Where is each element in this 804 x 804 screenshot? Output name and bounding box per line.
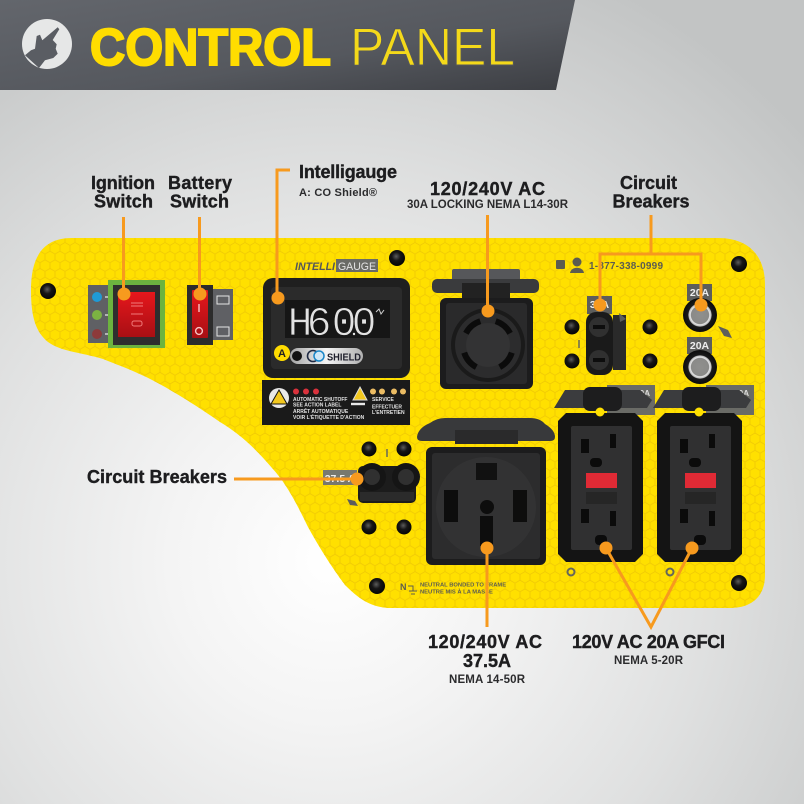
label: circuit breakers top: Breakers: [612, 192, 690, 212]
neutral bonded note: N: [400, 582, 406, 592]
label: 50A outlet: 37.5A: [463, 651, 511, 671]
label: ignition switch: [91, 173, 155, 212]
20A push breakers: 20A: [690, 287, 710, 299]
icon: ignition states: [92, 292, 111, 339]
intelligauge logo: INTELLI: [295, 261, 336, 273]
neutral bonded note: [400, 582, 506, 596]
CO Shield badge: SHIELD: [327, 352, 361, 364]
warning label: ARRÊT AUTOMATIQUE: [293, 407, 349, 415]
title: [90, 18, 515, 77]
intelligauge logo: [295, 259, 378, 273]
label: circuit breakers left: Circuit Breakers: [87, 467, 227, 487]
label: battery switch: Switch: [170, 192, 229, 212]
icon: service warning: [351, 387, 367, 404]
icon: battery off: [217, 327, 229, 336]
title: PANEL: [350, 18, 515, 77]
GFCI outlet B: [653, 385, 754, 562]
label: intelligauge: [299, 162, 397, 199]
icon: battery on: [217, 296, 229, 304]
intelligauge logo: GAUGE: [338, 261, 376, 273]
37.5A circuit breaker: 37.5 A: [325, 473, 356, 485]
label: GFCI outlets: 120V AC 20A GFCI: [572, 632, 725, 652]
warning label: VOIR L'ÉTIQUETTE D'ACTION: [293, 413, 365, 421]
GFCI outlet A: [554, 385, 655, 562]
digital readout: 0: [352, 302, 376, 348]
warning label: SEE ACTION LABEL: [293, 402, 341, 408]
warning label: EFFECTUER: [372, 404, 402, 410]
30A locking outlet: [432, 269, 539, 389]
digital readout: H: [288, 302, 312, 348]
label: GFCI outlets: NEMA 5-20R: [614, 655, 684, 667]
label: circuit breakers top: Circuit: [620, 173, 677, 193]
label: 30A outlet: [407, 179, 569, 211]
mounting screws: [40, 250, 747, 594]
warning label: L'ENTRETIEN: [372, 410, 405, 416]
20A push breakers: 20A: [690, 340, 710, 352]
phone number: 1-877-338-0999: [589, 261, 663, 272]
label: 50A outlet: NEMA 14-50R: [449, 674, 526, 686]
CO Shield badge: A: [278, 348, 286, 360]
digital readout: 0: [332, 302, 356, 348]
50A outlet: [417, 418, 555, 565]
red indicators: [293, 388, 319, 394]
twin circuit breaker (upper): [586, 296, 626, 375]
label: battery switch: [168, 173, 232, 212]
warning label: AUTOMATIC SHUTOFF: [293, 397, 347, 403]
yellow control panel plate: [31, 238, 765, 608]
CO Shield badge: [274, 345, 363, 364]
neutral bonded note: NEUTRAL BONDED TO FRAME: [420, 582, 506, 588]
label: 30A outlet: 30A LOCKING NEMA L14-30R: [407, 199, 569, 211]
label: battery switch: Battery: [168, 173, 232, 193]
neutral bonded note: NEUTRE MIS À LA MASSE: [420, 588, 493, 596]
GFCI outlet B: 20A: [734, 389, 749, 398]
battery switch: [187, 285, 233, 345]
warning label: [262, 380, 410, 425]
header banner: [0, 0, 575, 90]
20A push breakers: [683, 284, 732, 384]
label: intelligauge: A: CO Shield®: [299, 187, 377, 199]
digital readout: [285, 300, 390, 348]
icon: shutdown warning: [269, 388, 289, 408]
warning label: SERVICE: [372, 397, 395, 403]
title: CONTROL: [90, 19, 331, 77]
label: GFCI outlets: [572, 632, 725, 667]
digital readout: 6: [307, 302, 331, 348]
label: ignition switch: Switch: [94, 192, 153, 212]
leader lines and dots: [118, 170, 708, 627]
label: 50A outlet: [428, 632, 542, 686]
phone number: [556, 258, 663, 273]
label: ignition switch: Ignition: [91, 173, 155, 193]
twin circuit breaker (upper): 30A: [590, 299, 610, 311]
label: intelligauge: Intelligauge: [299, 162, 397, 182]
icon: pointing hand badge: [22, 19, 72, 69]
outlet markers A and B: [568, 568, 674, 576]
ignition switch: [88, 280, 165, 348]
label: 30A outlet: 120/240V AC: [430, 179, 545, 199]
amber indicators: [370, 388, 406, 394]
intelligauge display unit: [263, 278, 410, 378]
label: circuit breakers top: [612, 173, 690, 212]
label: 50A outlet: 120/240V AC: [428, 632, 542, 652]
37.5A circuit breaker: [323, 463, 420, 506]
GFCI outlet A: 20A: [635, 389, 650, 398]
